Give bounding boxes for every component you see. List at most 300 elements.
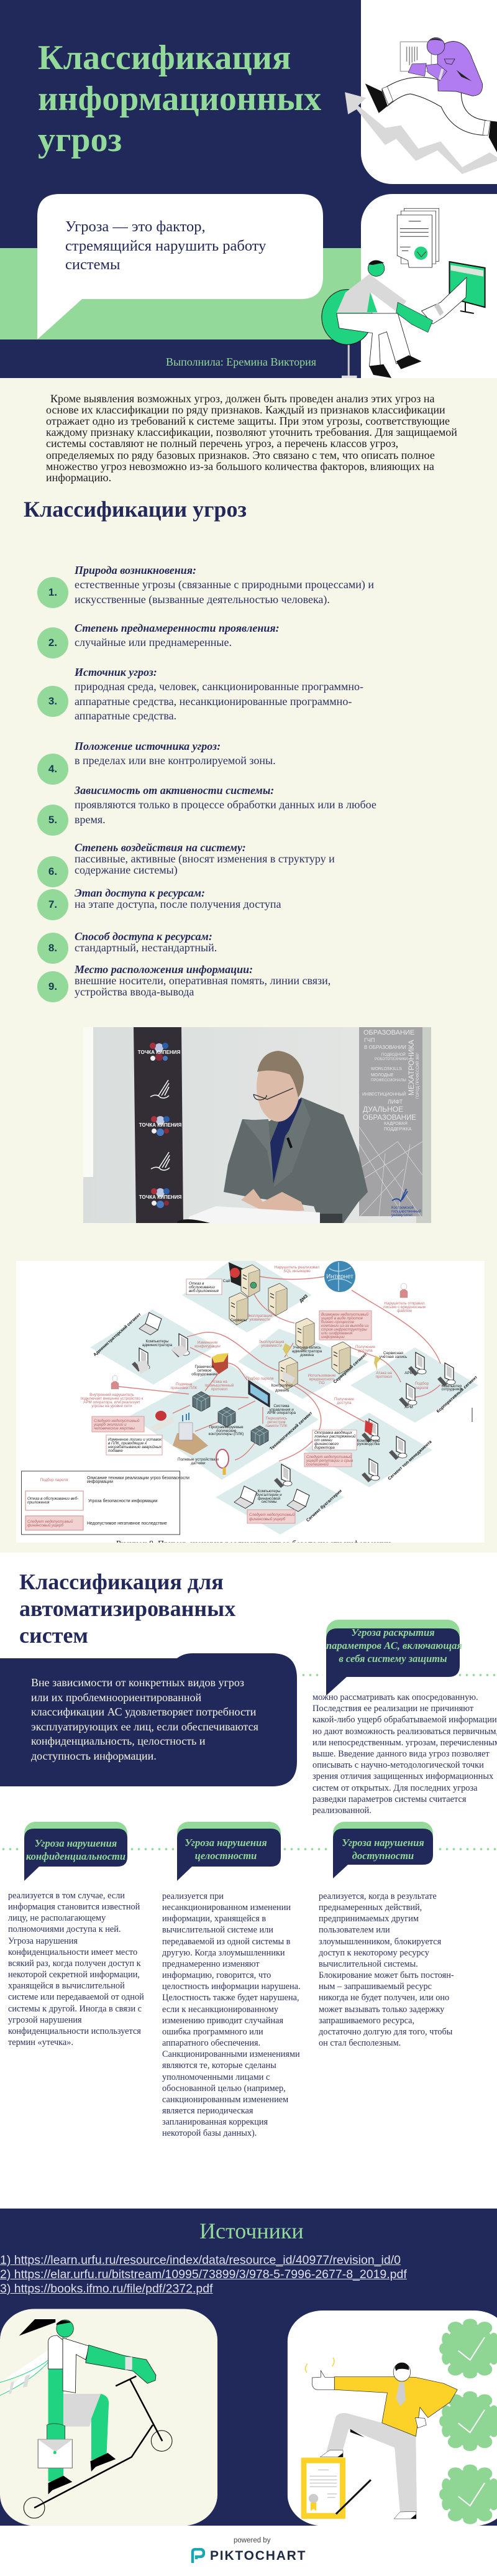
scenario labels: руководства [357, 1442, 380, 1446]
scenario labels: несрабатыванию аварийных [108, 1444, 162, 1449]
internet globe: Интернет [326, 1273, 353, 1280]
heading: classification for automated systems: автоматизированных [19, 1596, 235, 1621]
monitor [449, 262, 485, 313]
scenario labels: Полевые устройства и [178, 1457, 219, 1462]
scenario labels: сетевое [197, 1369, 212, 1373]
scenario labels: Эксплуатация [259, 1340, 284, 1344]
scenario labels: финансового [314, 1442, 339, 1446]
figure caption: Рисунок 8. Пример сценария реализации угроз безопасности информации [116, 1540, 391, 1549]
column: integrity: изменению приводит случайная [162, 2016, 283, 2026]
column: confidentiality: Угроза нарушения [8, 1936, 78, 1946]
grey banner: ПОДВОДНОЙ [381, 1052, 406, 1057]
text 1: Природа возникновения: [75, 564, 196, 576]
speaker [177, 1051, 368, 1223]
text 5: проявляются только в процессе обработки данных или в любое [75, 798, 376, 811]
sources list: 1) https://learn.urfu.ru/resource/index/data/resource_id/40977/revision_id/0 [0, 2253, 401, 2267]
callout shape [333, 1822, 433, 1878]
list item 5 [37, 784, 376, 836]
scenario labels: Получение [355, 1345, 375, 1349]
scenario labels: Атака на [376, 1371, 392, 1375]
title: Классификация [38, 39, 291, 77]
scenario labels: Компьютеры [257, 1489, 281, 1493]
dotted connector [437, 1847, 497, 1851]
callout shape [326, 1620, 460, 1696]
scenario labels: Использование [308, 1373, 336, 1378]
dotted connector [300, 1673, 323, 1677]
scenario labels: Перезапись [266, 1416, 288, 1421]
dark banner: ТОЧКА КИПЕНИЯ [139, 1122, 181, 1128]
scenario labels: учётная запись [380, 1355, 408, 1359]
scenario labels [81, 1265, 462, 1521]
scenario labels: уязвимости [249, 1318, 270, 1322]
number 1: 1. [48, 586, 57, 598]
scenario labels: контроллеры (ПЛК) [209, 1432, 244, 1436]
scenario labels: Подбор пароля [246, 1376, 273, 1381]
scenario labels: Следует недопустимый [94, 1418, 140, 1423]
scenario labels: Сайт [223, 1278, 232, 1283]
scenario labels: протокол [211, 1387, 228, 1392]
title: угроз [38, 121, 122, 159]
grey banner: ДУАЛЬНОЕ [363, 1105, 403, 1114]
sources list: 3) https://books.ifmo.ru/file/pdf/2372.pdf [0, 2282, 213, 2296]
internet globe [324, 1261, 355, 1292]
column: confidentiality: конфиденциальности имеет место [8, 1947, 137, 1957]
column: availability [319, 1891, 454, 2049]
callout text: Угроза раскрытия [351, 1627, 435, 1638]
parameter disclosure text: но дают возможность реализоваться первичным, [312, 1727, 497, 1737]
scenario labels: доступа [337, 1401, 352, 1405]
scenario labels: строя инфраструктуры [321, 1327, 367, 1332]
column: availability: вычислительной системы. [319, 1959, 418, 1969]
dark banner: ТОЧКА КИПЕНИЯ [139, 1194, 181, 1200]
navy block text: конфиденциальность, целостность и [31, 1735, 205, 1747]
text 5: Зависимость от активности системы: [75, 784, 274, 796]
legend: Отказ в обслуживании веб- [27, 1496, 78, 1501]
scenario labels: Граничное [195, 1365, 214, 1369]
text 8 [75, 930, 217, 954]
scenario labels: финансовый ущерб [249, 1517, 286, 1521]
heading: classification for automated systems: Классификация для [19, 1569, 224, 1594]
scenario labels: АРМ [404, 1405, 413, 1410]
column: integrity: информации, хранящейся в [162, 1914, 266, 1924]
title: информационных [38, 80, 321, 118]
panel: top right white [361, 0, 497, 184]
heading: classification for automated systems: систем [19, 1623, 88, 1648]
column: confidentiality: конфиденциальности используется [8, 2026, 141, 2036]
grey banner: ОБРАЗОВАНИЕ [363, 1114, 416, 1122]
text 9 [75, 963, 331, 998]
scenario labels: Следует недопустимый [249, 1512, 295, 1517]
grey banner: МОЛОДЫЕ [371, 1073, 394, 1078]
scenario labels: регистров [267, 1420, 286, 1424]
legend: Недопустимое негативное последствие [87, 1521, 167, 1526]
scenario labels: вредоносного [309, 1377, 335, 1382]
scenario labels: письмо с вредоносным [383, 1305, 426, 1309]
grey banner: ПРОФЕССИОНАЛЫ [371, 1079, 406, 1083]
column: integrity: информацию, говорится, что [162, 1970, 271, 1980]
column: confidentiality: термин «утечка». [8, 2038, 73, 2047]
grey banner: WORLDSKILLS [371, 1067, 402, 1071]
scenario labels: веб-приложения [189, 1288, 219, 1293]
scenario labels: информации [321, 1335, 345, 1339]
piktochart wordmark: PIKTOCHART [210, 2549, 306, 2563]
scenario labels: Программируемые [209, 1425, 244, 1429]
text 6: Степень воздействия на систему: [75, 841, 246, 854]
scenario labels: памяти ПЛК [265, 1424, 288, 1428]
callout text: доступности [352, 1850, 414, 1862]
column: confidentiality: лицу, не располагающему [8, 1913, 106, 1923]
column: confidentiality: хранящейся в вычислительной [8, 1981, 125, 1991]
column: availability: преднамеренных действий, [319, 1903, 422, 1913]
column: confidentiality: угрозой нарушения [8, 2015, 82, 2025]
scenario labels: файлом [397, 1308, 412, 1313]
scenario labels: угрозы на уровне сети [91, 1404, 132, 1408]
number 6: 6. [48, 866, 57, 877]
navy text block [0, 1653, 297, 1786]
column: availability: злоумышленником, блокируется [319, 1937, 441, 1947]
scenario labels: человеческие жертвы [94, 1426, 135, 1431]
bubble text [65, 218, 266, 273]
scenario labels: пароля [416, 1386, 428, 1390]
column: integrity: Целостность также будет нарушена, [162, 1993, 299, 2003]
intro paragraph: информацию. [46, 471, 111, 484]
text 9: Место расположения информации: [75, 963, 253, 976]
column: confidentiality: некоторой секретной информации, [8, 1970, 140, 1980]
column: integrity: ошибка программного или [162, 2027, 263, 2037]
column: availability: никогда не будет получен, или оно [319, 1993, 449, 2003]
scenario labels: Система [273, 1404, 290, 1408]
grey banner: РОБОТОТЕХНИКИ [375, 1058, 408, 1061]
column: integrity: другую. Когда злоумышленники [162, 1948, 285, 1958]
column: integrity: реализуется при [162, 1891, 224, 1901]
scenario labels: обслуживании [189, 1285, 215, 1290]
number 4: 4. [48, 763, 57, 775]
number 5: 5. [48, 814, 57, 826]
scenario labels: оборудование [191, 1372, 217, 1377]
intro paragraph: отражает одно из требований к системе защиты. При этом угрозы, соответствующие [46, 415, 450, 427]
text 3 [75, 666, 363, 722]
scenario labels: сотрудника [442, 1387, 462, 1392]
figure: purple person [365, 37, 497, 152]
text 8: Способ доступа к ресурсам: [75, 930, 212, 943]
title [38, 39, 321, 159]
scenario labels: промышленный [205, 1383, 234, 1388]
column: confidentiality: полномочиями доступа к ней. [8, 1924, 121, 1934]
powered by: powered by [234, 2537, 270, 2544]
scenario labels: Изменение [198, 1341, 218, 1345]
intro paragraph [46, 392, 457, 484]
navy block text [31, 1676, 258, 1762]
callout text [342, 1837, 424, 1862]
scenario labels: Сервисная [383, 1351, 403, 1355]
scenario labels: Подбор [415, 1381, 429, 1386]
photo: speaker at lectern [83, 1027, 431, 1223]
callout text: Угроза нарушения [185, 1837, 267, 1849]
bubble text: системы [65, 256, 120, 273]
column: availability: ным – запрашиваемый ресурс [319, 1982, 432, 1992]
grey banner: КАДРОВАЯ [384, 1122, 408, 1126]
parameter disclosure text: описывать с научно-методологической точки [312, 1760, 484, 1770]
scenario labels: прошивки ПЛК [171, 1386, 198, 1390]
column: availability: реализуется, когда в результате [319, 1891, 437, 1901]
column: confidentiality: информация становится известной [8, 1902, 140, 1912]
list item 3 [37, 666, 363, 722]
callout: integrity [177, 1822, 281, 1881]
panel: scooter figure [0, 2309, 217, 2526]
column: availability: доступ к некоторому ресурсу [319, 1948, 429, 1958]
number 9: 9. [48, 981, 57, 992]
column: integrity: аппаратного обеспечения. [162, 2038, 260, 2048]
scenario labels: ПО [319, 1381, 325, 1385]
text 6: пассивные, активные (вносят изменения в структуру и [75, 852, 335, 865]
column: integrity: несанкционированном изменении [162, 1903, 291, 1913]
text 9: устройства ввода-вывода [75, 986, 194, 998]
segment names: ДМЗ [299, 1294, 309, 1304]
scenario labels: директора [314, 1445, 335, 1450]
callout: availability [333, 1822, 433, 1878]
navy block text: Вне зависимости от конкретных видов угроз [31, 1676, 244, 1689]
column: integrity: санкционированным изменением [162, 2095, 288, 2105]
grey banner: ГЧП [364, 1037, 375, 1043]
number 3: 3. [48, 695, 57, 707]
scenario labels: Отказ в [189, 1281, 204, 1286]
column: integrity: целостность информации нарушена. [162, 1982, 301, 1992]
dotted connector [457, 1673, 497, 1677]
legend [21, 1471, 189, 1535]
scenario labels: ущерб репутации и срыв [306, 1458, 353, 1463]
scenario labels: Серверы [230, 1318, 247, 1323]
text 1: искусственные (вызванные деятельностью человека). [75, 593, 330, 606]
text 3: природная среда, человек, санкционированные программно- [75, 680, 363, 693]
illustration: header figures [321, 37, 497, 378]
scenario labels: домена [275, 1388, 289, 1393]
segment names: Сегмент бухгалтерии [305, 1489, 343, 1523]
legend: информации [87, 1480, 113, 1484]
number 9 [37, 971, 68, 1002]
column: integrity: обоснованной целью (например, [162, 2084, 286, 2094]
scenario labels: системы [261, 1500, 277, 1504]
intro paragraph: множество угроз невозможно из-за большого количества факторов, влияющих на [46, 460, 434, 473]
segment names: Сегмент топ-менеджмента [387, 1439, 433, 1481]
grey banner: В ОБРАЗОВАНИИ [364, 1045, 406, 1050]
dark banner [134, 1027, 183, 1223]
column: confidentiality: реализуется в том случае, если [8, 1891, 125, 1901]
firewall and industrial equipment [150, 1353, 270, 1475]
scenario labels: администратора [142, 1343, 173, 1347]
legend: Описание техники реализации угроз безопасности [87, 1475, 189, 1480]
text 7: Этап доступа к ресурсам: [75, 887, 205, 899]
sources list [0, 2253, 407, 2296]
figure: seated person [337, 260, 467, 378]
list item 8 [37, 930, 217, 964]
documents [397, 208, 439, 267]
number 7: 7. [48, 898, 57, 910]
scenario labels: компании из-за выхода из [321, 1323, 368, 1328]
dark banner: ТОЧКА КИПЕНИЯ [138, 1050, 180, 1055]
threat boxes [92, 1279, 372, 1523]
navy block text: или их проблемноориентированной [31, 1691, 201, 1704]
callout text: конфиденциальности [26, 1850, 125, 1862]
number 6 [37, 856, 68, 887]
segment names: Технологический сегмент [269, 1410, 314, 1451]
dotted connector [281, 1847, 329, 1851]
scenario labels: от имени [314, 1438, 332, 1443]
segment names: Серверный сегмент [332, 1352, 368, 1385]
number 2 [37, 627, 68, 658]
column: availability: предпринимаемых другим [319, 1914, 419, 1924]
number 8 [37, 933, 68, 964]
column: integrity: некоторой базы данных). [162, 2128, 257, 2138]
number 2: 2. [48, 637, 57, 649]
column: confidentiality: системе или передаваемой от одной [8, 1992, 144, 2002]
scenario labels: АРМ оператора, или реализует [83, 1400, 140, 1405]
scenario labels: Отправка вводящих [314, 1430, 353, 1435]
scenario labels: бухгалтерии и [256, 1492, 282, 1497]
list item 4 [37, 740, 276, 785]
column: integrity: преднамеренно изменяют [162, 1959, 260, 1969]
callout text [185, 1837, 267, 1862]
parameter disclosure text: систем от открытых. Для последних угроза [312, 1783, 478, 1793]
scenario labels: протокол [376, 1375, 393, 1379]
text 4: Положение источника угроз: [75, 740, 221, 752]
sources list: 2) https://elar.urfu.ru/bitstream/10995/73899/3/978-5-7996-2677-8_2019.pdf [0, 2268, 407, 2281]
grey banner: государственный [391, 1209, 421, 1214]
intro paragraph: каждому признаку классификации, позволяют уточнить требования. Для защищаемой [46, 426, 457, 438]
scenario labels: Следует недопустимый [306, 1454, 352, 1459]
intro paragraph: определяемых по ряду базовых признаков. Это связано с тем, что описать полное [46, 449, 435, 461]
rising arrow [345, 92, 497, 174]
scenario labels: АРМ [404, 1371, 413, 1375]
servers and computers [132, 1262, 455, 1512]
column: availability: достаточно долгую для того, чтобы [319, 2027, 452, 2037]
scenario labels: Атака на [211, 1380, 227, 1384]
column: integrity: является периодическая [162, 2106, 253, 2116]
parameter disclosure text [312, 1692, 497, 1816]
column: confidentiality [8, 1891, 144, 2047]
piktochart logo icon [191, 2548, 205, 2564]
scenario labels: Учетная запись [293, 1346, 321, 1350]
illustrations: footer panels [0, 2309, 497, 2526]
list item 2 [37, 622, 280, 658]
scenario labels: датчики [191, 1461, 206, 1466]
text 1 [75, 564, 374, 606]
scenario labels: бизнес-процессов [321, 1319, 354, 1324]
scenario labels: АРМ оператора [267, 1411, 296, 1415]
number 4 [37, 754, 68, 785]
scenario labels: логические [216, 1429, 237, 1433]
text 9: внешние носители, оперативная помять, линии связи, [75, 974, 331, 987]
callout text: целостности [195, 1850, 257, 1862]
text 7 [75, 887, 281, 910]
scenario labels: Нарушитель реализовал [275, 1265, 320, 1270]
text 4 [75, 740, 276, 767]
network segments [90, 1261, 478, 1535]
scenario labels: конфигурации [194, 1344, 221, 1349]
cream background for middle part [0, 378, 497, 1553]
chair [322, 290, 372, 378]
callout shape [177, 1822, 281, 1881]
parameter disclosure text: или непосредственным. угрозам, перечисленным [312, 1738, 497, 1748]
parameter disclosure text: Последствия ее реализации не причиняют [312, 1704, 473, 1714]
column: availability: запрашиваемого ресурса, [319, 2016, 414, 2026]
callout text: в себя систему защиты [339, 1653, 447, 1664]
text 6 [75, 841, 335, 876]
bubble text: стремящийся нарушить работу [65, 238, 266, 254]
text 2: Степень преднамеренности проявления: [75, 622, 280, 634]
text 4: в пределах или вне контролируемой зоны. [75, 754, 276, 767]
column: integrity: Санкционированными изменениями [162, 2049, 300, 2059]
panel: lower right white [361, 194, 497, 378]
list item 1 [37, 564, 374, 608]
callout text [26, 1837, 125, 1862]
column: availability: Блокирование может быть постоян- [319, 1970, 454, 1980]
panel: thumbs-up figure [288, 2311, 497, 2526]
scenario labels: Подмена [176, 1382, 193, 1387]
column: integrity: вычислительной системе или [162, 1925, 273, 1935]
text 2 [75, 622, 280, 649]
text 8: стандартный, нестандартный. [75, 941, 217, 954]
grey banner: университет [391, 1214, 413, 1217]
sources heading: Источники [199, 2218, 304, 2243]
scenario labels: домена [300, 1353, 314, 1357]
grey banner: ИНВЕСТИЦИОННЫЙ [362, 1091, 406, 1097]
heading: classifications of threats: Классификации угроз [24, 497, 247, 522]
segment names: Администраторский сегмент [93, 1312, 142, 1357]
column: integrity: передаваемой из одной системы в [162, 1937, 290, 1947]
text 3: аппаратные средства, несанкционированные программно- [75, 695, 352, 708]
column: confidentiality: системы к другой. Иногда в связи с [8, 2004, 142, 2014]
column: integrity: являются те, которые сделаны [162, 2061, 276, 2070]
segment names [93, 1294, 478, 1523]
number 3 [37, 686, 68, 717]
column: integrity: если к несанкционированному [162, 2005, 278, 2015]
column: availability: он стал бесполезным. [319, 2038, 401, 2048]
scenario labels: в ПЛК, приводящие к [108, 1441, 147, 1446]
parameter disclosure text: реализованной. [312, 1806, 372, 1816]
scenario labels: Возможен недопустимый [321, 1312, 369, 1317]
scenario labels: доступа [358, 1349, 373, 1353]
column: integrity [162, 1891, 301, 2139]
column: confidentiality: всякий раз, когда получен доступ к [8, 1959, 141, 1969]
scenario labels: уязвимости [261, 1344, 282, 1348]
callout: confidentiality [24, 1822, 127, 1881]
grey banner: Костромской [391, 1206, 414, 1210]
number 1 [37, 577, 68, 608]
navy block text: доступность информации. [31, 1750, 157, 1762]
scenario labels: Контроллер [271, 1383, 293, 1388]
scenario labels: Компьютеры [357, 1439, 380, 1443]
scenario labels: Компьютер [442, 1384, 462, 1388]
text 6: содержание системы) [75, 864, 178, 876]
text 5: время. [75, 813, 106, 826]
column: availability: может вызывать только задержку [319, 2005, 444, 2015]
parameter disclosure text: можно рассматривать как опосредованную. [312, 1692, 478, 1702]
callout: parameter disclosure threat [326, 1620, 462, 1696]
parameter disclosure text: какой-либо ущерб обрабатываемой информации, [312, 1715, 497, 1725]
text 3: Источник угроз: [75, 666, 157, 678]
dotted connector [0, 1847, 23, 1851]
scenario labels: администратора [292, 1349, 322, 1354]
grey banner: МЕХАТРОНИКА [407, 1040, 416, 1096]
legend: приложения [27, 1500, 50, 1505]
diagram: threat scenario network [16, 1261, 485, 1543]
scenario labels: Внутренний нарушитель [89, 1392, 135, 1397]
heading: classification for automated systems [19, 1569, 236, 1648]
grey banner: ЛИФТ [388, 1099, 403, 1105]
speech bubble [37, 194, 323, 339]
intro paragraph: основе их классификации по ряду признаков. Каждый из признаков классификации [46, 404, 445, 416]
scenario labels: подавке [108, 1448, 123, 1453]
